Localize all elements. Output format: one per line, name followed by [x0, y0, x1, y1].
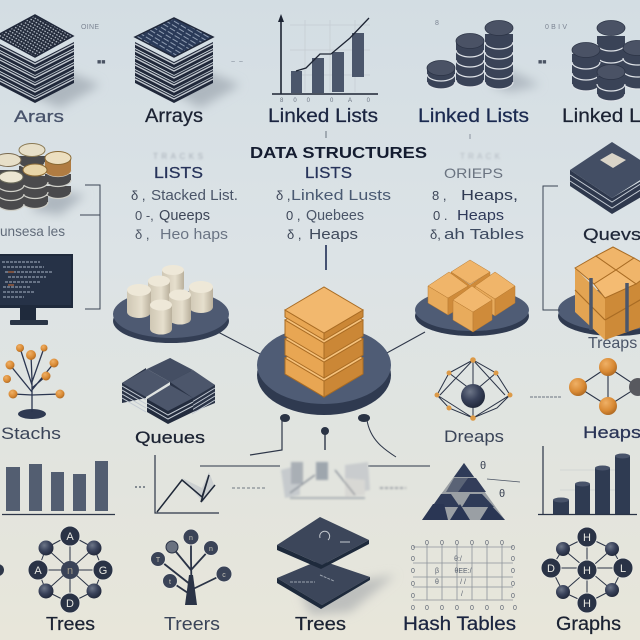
table: hash table grid: β: [435, 568, 439, 575]
table: hash table grid: 0: [511, 593, 515, 600]
table: hash table grid: 0: [511, 581, 515, 588]
text block: column 2: δ ,: [287, 227, 301, 242]
text block: column 2: [276, 165, 391, 243]
table: hash table grid: 0: [411, 556, 415, 563]
small marks: OINE: [81, 24, 99, 31]
graph: right: L: [620, 563, 626, 575]
panel: cream cylinders: [0, 144, 85, 215]
label: Arars: Arars: [14, 107, 64, 126]
graph: left: A: [66, 531, 74, 543]
text block: column 1: δ ,: [135, 227, 149, 242]
icon: dark tree: T: [156, 557, 161, 564]
label: Hash Tables: Hash Tables: [403, 614, 516, 635]
text block: column 2: Linked Lusts: [291, 187, 391, 204]
text block: column 3: ah Tables: [444, 226, 524, 243]
bar chart: left: [2, 461, 115, 514]
text block: column 1: Queeps: [159, 207, 210, 224]
label: Arrays: Arrays: [145, 106, 203, 127]
line chart: center left: [135, 455, 265, 513]
text block: column 2: LISTS: [305, 165, 352, 182]
label: Graphs: Graphs: [556, 614, 621, 635]
table: hash table grid: 0: [511, 556, 515, 563]
table: hash table grid: 0: [425, 605, 429, 612]
text block: column 1: LISTS: [154, 165, 203, 182]
chart: linked list bars and trend: 0 A 0: [330, 98, 371, 104]
text block: column 1: δ ,: [131, 188, 145, 203]
text block: column 3: 0 .: [433, 208, 447, 223]
label: Linked Lists chart: Linked Lists: [268, 106, 378, 127]
text block: column 2: 0 ,: [286, 208, 300, 223]
table: hash table grid: 0: [440, 605, 444, 612]
table: hash table grid: 0: [513, 605, 517, 612]
label: Unsesables: unsesa les: [0, 223, 65, 239]
connectors: [200, 245, 430, 466]
graph: right: H: [583, 532, 591, 544]
text block: column 3: 8 ,: [432, 188, 446, 203]
icon: dark tree: n: [189, 535, 193, 542]
bar chart: right: [538, 446, 637, 514]
icon: dark tree: [150, 529, 232, 605]
text block: column 1: Heo haps: [160, 226, 228, 243]
platform: central with orange stack: [257, 287, 391, 415]
chart: linked list bars and trend: [272, 14, 378, 104]
label: Stachs: Stachs: [1, 424, 61, 443]
icon: dark tree: c: [222, 572, 226, 579]
table: hash table grid: 0: [411, 568, 415, 575]
connector pins: [280, 414, 370, 435]
small marks: ~~: [231, 59, 243, 66]
icon: dark tree: t: [169, 579, 171, 586]
panel: cylinder stacks: [427, 20, 540, 92]
platform: four orange cubes: [415, 260, 529, 336]
text block: column 3: Heaps: [457, 207, 504, 224]
small marks: 8: [435, 20, 439, 27]
label: Treaps: Treaps: [588, 335, 637, 352]
label: Trees center: Trees: [295, 614, 346, 634]
table: hash table grid: 0: [470, 540, 474, 547]
table: hash table grid: θEE:/: [454, 568, 472, 575]
text block: column 2: Heaps: [309, 226, 358, 243]
label: Trees: Trees: [46, 614, 95, 634]
icon: chip stack: [570, 142, 640, 214]
pyramid labels: θ: [480, 460, 486, 472]
table: hash table grid: 0: [511, 545, 515, 552]
table: hash table grid: 0: [425, 540, 429, 547]
pyramid labels: θ: [499, 488, 505, 500]
table: hash table grid: /: [461, 591, 463, 598]
icon: stacked plates: [277, 517, 395, 615]
text block: column 3: δ,: [430, 227, 441, 242]
text block: column 3: Heaps,: [461, 187, 518, 204]
label: Heaps: Heaps: [583, 423, 640, 442]
table: hash table grid: 0: [455, 540, 459, 547]
text block: column 1: TRACKS: [153, 152, 203, 161]
label: Queues right: Quevs: [583, 225, 640, 244]
icon: dark tree: n: [209, 546, 213, 553]
table: hash table grid: 0: [485, 540, 489, 547]
icon: monitor: [0, 254, 73, 325]
label: Treers: Treers: [164, 614, 220, 634]
icon: pyramid: [422, 463, 505, 520]
panel: arrays stack: [135, 18, 240, 108]
platform: orange block tower right: [558, 247, 640, 340]
text block: column 3: [430, 152, 524, 243]
dash: [530, 396, 562, 398]
graph: left: [0, 526, 113, 613]
faded center diagram: [281, 462, 406, 498]
text block: column 3: ORIEPS: [444, 165, 503, 181]
text block: column 1: [131, 152, 238, 243]
graph: left: A: [34, 565, 42, 577]
graph: left: n: [67, 565, 73, 577]
table: hash table grid: θ: [435, 579, 439, 586]
small marks: ■■: [538, 59, 546, 66]
title: DATA STRUCTURES: [250, 145, 427, 162]
table: hash table grid: 0: [500, 605, 504, 612]
graph: right: H: [583, 598, 591, 610]
icon: queue chip stacks: [122, 358, 215, 424]
chart: linked list bars and trend: 8 0 0: [280, 98, 311, 104]
table: hash table grid: θ:/: [454, 556, 462, 563]
bracket right: [543, 186, 560, 310]
table: hash table grid: 0: [511, 568, 515, 575]
text block: column 2: Quebees: [306, 207, 364, 224]
bracket left: [80, 185, 100, 309]
table: hash table grid: 0: [470, 605, 474, 612]
table: hash table grid: [411, 540, 517, 612]
graph: left: D: [66, 598, 74, 610]
table: hash table grid: 0: [440, 540, 444, 547]
pyramid labels: [480, 460, 520, 500]
panel: arrays stack left: [0, 15, 100, 108]
table: hash table grid: / /: [460, 579, 466, 586]
icon: heap nodes: [569, 358, 640, 415]
table: hash table grid: 0: [500, 540, 504, 547]
small marks: ■■: [97, 59, 105, 66]
small marks: 0 B I V: [545, 24, 567, 31]
label: Linked Lists cylinders: Linked Lists: [418, 106, 529, 127]
table: hash table grid: 0: [411, 593, 415, 600]
graph: left: G: [99, 565, 107, 577]
graph: right: [541, 527, 633, 613]
icon: orange tree: [3, 344, 64, 419]
text block: column 1: Stacked List.: [151, 187, 238, 204]
text block: column 3: TRACK: [460, 152, 501, 161]
label: Queues: Queues: [135, 428, 205, 447]
table: hash table grid: 0: [485, 605, 489, 612]
graph: right: D: [547, 563, 555, 575]
label: Dreaps: Dreaps: [444, 427, 504, 446]
table: hash table grid: 0: [411, 581, 415, 588]
table: hash table grid: 0: [411, 545, 415, 552]
graph: right: H: [583, 565, 591, 577]
platform: left with cream cylinders: [113, 265, 229, 343]
table: hash table grid: 0: [411, 605, 415, 612]
small marks: [81, 20, 567, 139]
icon: polyhedron: [434, 357, 512, 421]
text block: column 1: 0 -,: [135, 208, 154, 223]
panel: cylinder cluster right: [572, 20, 640, 101]
table: hash table grid: 0: [455, 605, 459, 612]
text block: column 2: δ ,: [276, 188, 290, 203]
